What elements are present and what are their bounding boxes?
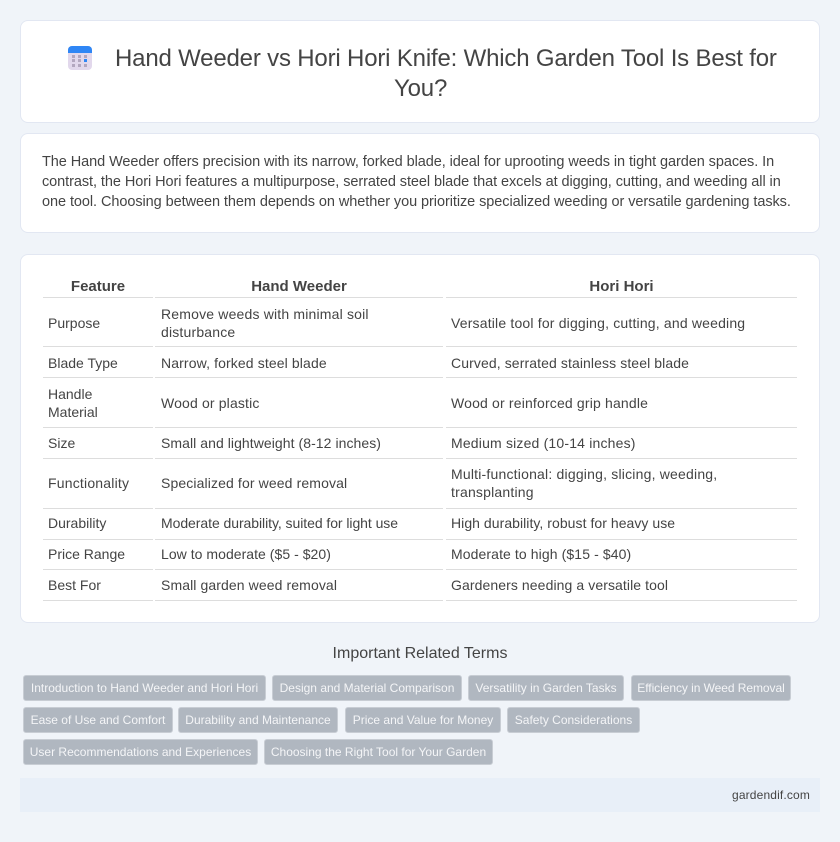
title: You?: [394, 75, 447, 102]
table rows text: Small garden weed removal: [161, 577, 337, 593]
intro text: contrast, the Hori Hori features a multipurpose, serrated steel blade that excels at digging, cutting, and weeding all in: [42, 174, 781, 190]
panel: title card: [20, 20, 820, 123]
table rows text: Moderate durability, suited for light use: [161, 515, 398, 531]
panel: intro card: [20, 133, 820, 233]
related terms heading: Important Related Terms: [333, 645, 507, 662]
table rows text: Curved, serrated stainless steel blade: [451, 355, 689, 371]
table rows text: Size: [48, 435, 75, 451]
intro text: The Hand Weeder offers precision with its narrow, forked blade, ideal for uprooting weeds in tight garden spaces. In: [42, 154, 774, 170]
related terms tags: Ease of Use and Comfort: [31, 713, 165, 727]
table rows text: Durability: [48, 515, 106, 531]
table rows text: Blade Type: [48, 355, 118, 371]
table rows text: Price Range: [48, 546, 125, 562]
related terms tags: [23, 675, 791, 765]
table rows text: Wood or reinforced grip handle: [451, 395, 648, 411]
related terms tags: Design and Material Comparison: [280, 681, 454, 695]
related terms tags: Efficiency in Weed Removal: [637, 681, 785, 695]
table rows text: Narrow, forked steel blade: [161, 355, 327, 371]
table rows text: Best For: [48, 577, 101, 593]
related terms tags: Safety Considerations: [515, 713, 632, 727]
panel: comparison table: Hand Weeder: [251, 278, 347, 295]
table rows text: Wood or plastic: [161, 395, 259, 411]
table rows text: [48, 306, 745, 593]
table rows text: Purpose: [48, 315, 100, 331]
related terms tags: Choosing the Right Tool for Your Garden: [271, 745, 486, 759]
table rows text: disturbance: [161, 324, 235, 340]
footer bar: [20, 778, 820, 812]
table rows text: Functionality: [48, 475, 129, 491]
icon: calendar: [68, 46, 92, 70]
table rows text: Versatile tool for digging, cutting, and weeding: [451, 315, 745, 331]
table rows text: Multi-functional: digging, slicing, weeding,: [451, 466, 717, 482]
table rows text: Small and lightweight (8-12 inches): [161, 435, 381, 451]
table header: Feature: [71, 278, 125, 295]
table rows text: High durability, robust for heavy use: [451, 515, 675, 531]
related terms tags: Introduction to Hand Weeder and Hori Hori: [31, 681, 258, 695]
intro text: [42, 154, 791, 210]
table rows text: Low to moderate ($5 - $20): [161, 546, 331, 562]
table rules: [43, 297, 797, 601]
table rows text: Medium sized (10-14 inches): [451, 435, 636, 451]
table rows text: Moderate to high ($15 - $40): [451, 546, 631, 562]
related terms tags: User Recommendations and Experiences: [30, 745, 251, 759]
related terms tags: Price and Value for Money: [353, 713, 493, 727]
title: Hand Weeder vs Hori Hori Knife: Which Garden Tool Is Best for: [115, 45, 777, 72]
table rows text: Remove weeds with minimal soil: [161, 306, 369, 322]
footer source text: gardendif.com: [732, 788, 810, 802]
table rows text: Handle: [48, 386, 92, 402]
table rows text: Specialized for weed removal: [161, 475, 347, 491]
table rows text: Gardeners needing a versatile tool: [451, 577, 668, 593]
related terms tags: Versatility in Garden Tasks: [475, 681, 617, 695]
related terms tags: Durability and Maintenance: [185, 713, 331, 727]
title: [115, 45, 777, 102]
table rows text: transplanting: [451, 484, 534, 500]
table rows text: Material: [48, 404, 98, 420]
intro text: one tool. Choosing between them depends on whether you prioritize specialized weeding or versatile gardening tasks.: [42, 194, 791, 210]
panel: comparison table: [20, 254, 820, 623]
panel: comparison table: Hori Hori: [589, 278, 654, 295]
